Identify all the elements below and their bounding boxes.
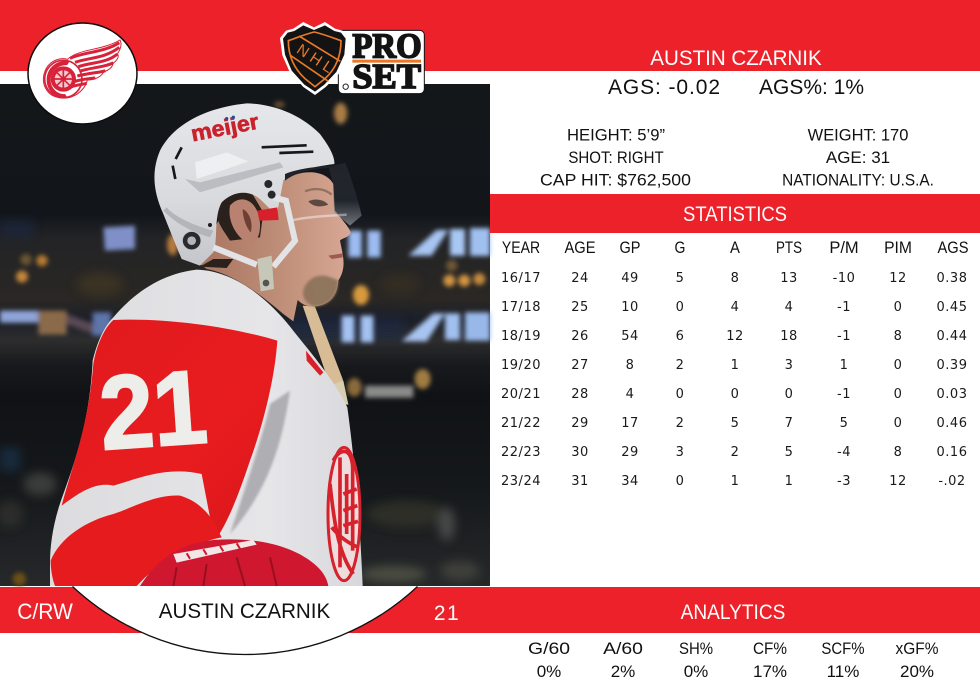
row 21/22: 0: [894, 416, 902, 431]
row 18/19: 18/19: [501, 329, 541, 344]
row 23/24: 12: [889, 474, 907, 489]
row 20/21: 28: [571, 387, 589, 402]
row 18/19: [501, 329, 967, 344]
sponsor wordmark: meijer: [189, 109, 261, 146]
rivets: [264, 180, 272, 188]
statistics header bar: [490, 194, 980, 233]
row 16/17: 12: [889, 271, 907, 286]
row 17/18: -1: [837, 300, 851, 315]
row 21/22: 21/22: [501, 416, 541, 431]
column headers: P/M: [829, 239, 859, 257]
row 20/21: [501, 387, 967, 402]
player photo: [0, 84, 490, 586]
row 21/22: [501, 416, 967, 431]
player bio: left column: HEIGHT: 5’9”: [567, 125, 665, 145]
jersey number: 21: [434, 602, 460, 625]
row 20/21: 20/21: [501, 387, 541, 402]
row 17/18: 25: [571, 300, 589, 315]
row 16/17: -10: [833, 271, 855, 286]
column headers: G: [675, 239, 685, 257]
row 19/20: 3: [785, 358, 793, 373]
row 18/19: 6: [676, 329, 684, 344]
analytics table: xGF%: [896, 639, 938, 658]
analytics table: SH%: [679, 640, 713, 658]
player bio: right column: AGE: 31: [826, 148, 890, 167]
position label: C/RW: [17, 600, 73, 624]
player bio: right column: [782, 125, 934, 190]
row 17/18: 0.45: [937, 300, 967, 315]
orange rule: [352, 60, 421, 63]
NHL shield: NHL: [293, 41, 336, 77]
jersey body: [50, 270, 363, 586]
analytics table: 0%: [684, 662, 708, 681]
row 22/23: 3: [676, 445, 684, 460]
row 19/20: 8: [626, 358, 634, 373]
row 22/23: 2: [731, 445, 739, 460]
analytics table: 0%: [537, 662, 561, 681]
row 17/18: 4: [731, 300, 739, 315]
helmet: [154, 103, 334, 291]
row 21/22: 29: [571, 416, 589, 431]
row 22/23: 30: [571, 445, 589, 460]
row 18/19: 12: [726, 329, 744, 344]
sleeve number: 21: [96, 350, 210, 472]
row 22/23: 22/23: [501, 445, 541, 460]
row 19/20: 19/20: [501, 358, 541, 373]
row 16/17: 24: [571, 271, 589, 286]
row 19/20: 2: [676, 358, 684, 373]
column headers: AGE: [565, 239, 595, 257]
row 20/21: -1: [837, 387, 851, 402]
AGS summary: AGS%: 1%: [759, 76, 864, 99]
registered mark: [343, 84, 348, 89]
row 22/23: [501, 445, 967, 460]
row 18/19: 8: [894, 329, 902, 344]
row 19/20: 27: [571, 358, 589, 373]
hockey stick: [303, 306, 348, 405]
eye and brow: [308, 200, 328, 206]
AGS summary: AGS: -0.02: [608, 76, 720, 99]
row 21/22: 17: [621, 416, 639, 431]
analytics table: A/60: [603, 639, 643, 658]
row 17/18: 0: [676, 300, 684, 315]
side plate: [195, 152, 248, 179]
vents: [173, 145, 313, 179]
NHL sticker: [182, 231, 201, 250]
row 23/24: 23/24: [501, 474, 541, 489]
row 21/22: 7: [785, 416, 793, 431]
player name heading: AUSTIN CZARNIK: [650, 47, 822, 70]
row 18/19: 18: [780, 329, 798, 344]
chin clip: [257, 256, 274, 291]
player bio: left column: SHOT: RIGHT: [568, 148, 664, 167]
row 20/21: 4: [626, 387, 634, 402]
analytics table: 20%: [900, 662, 934, 681]
PRO wordmark: PRO: [352, 27, 422, 65]
row 19/20: [501, 358, 967, 373]
analytics table: SCF%: [821, 640, 865, 658]
AGS summary: [608, 76, 864, 99]
column headers: PTS: [776, 239, 802, 257]
column headers: PIM: [884, 239, 912, 257]
row 20/21: 0: [731, 387, 739, 402]
row 21/22: 2: [676, 416, 684, 431]
row 17/18: 4: [785, 300, 793, 315]
SET wordmark: SET: [352, 58, 421, 96]
row 23/24: 31: [571, 474, 589, 489]
row 18/19: 26: [571, 329, 589, 344]
hair: [200, 190, 263, 268]
analytics table: 11%: [827, 662, 859, 681]
row 22/23: 5: [785, 445, 793, 460]
neck and face: [200, 172, 351, 321]
row 17/18: 17/18: [501, 300, 541, 315]
player bio: left column: [540, 125, 691, 189]
row 19/20: 1: [731, 358, 739, 373]
row 20/21: 0.03: [937, 387, 967, 402]
row 22/23: 29: [621, 445, 639, 460]
row 18/19: -1: [837, 329, 851, 344]
row 16/17: [501, 271, 967, 286]
team crest on jersey: [328, 447, 360, 581]
row 23/24: 34: [621, 474, 639, 489]
nameplate semicircle: [72, 586, 418, 654]
row 19/20: 1: [840, 358, 848, 373]
row 16/17: 0.38: [937, 271, 967, 286]
column headers: A: [730, 239, 740, 257]
row 16/17: 13: [780, 271, 798, 286]
row 20/21: 0: [785, 387, 793, 402]
row 20/21: 0: [676, 387, 684, 402]
row 19/20: 0: [894, 358, 902, 373]
row 23/24: 1: [785, 474, 793, 489]
row 18/19: 0.44: [937, 329, 967, 344]
white wordmark panel: [338, 30, 424, 94]
row 17/18: 10: [621, 300, 639, 315]
row 23/24: 0: [676, 474, 684, 489]
row 20/21: 0: [894, 387, 902, 402]
red side patch: [257, 207, 279, 221]
column headers: [502, 239, 968, 257]
row 22/23: 0.16: [937, 445, 967, 460]
row 23/24: [501, 474, 966, 489]
analytics heading: ANALYTICS: [681, 601, 785, 624]
ear: [229, 199, 260, 244]
row 17/18: 0: [894, 300, 902, 315]
column headers: YEAR: [502, 239, 540, 257]
mesh side panel: [230, 391, 290, 534]
top red banner: [0, 0, 980, 71]
player bio: left column: CAP HIT: $762,500: [540, 170, 691, 189]
glove: [140, 539, 328, 586]
row 16/17: 16/17: [501, 271, 541, 286]
logo: NHL Pro Set: [280, 22, 424, 96]
row 16/17: 5: [676, 271, 684, 286]
analytics table: 2%: [611, 662, 635, 681]
row 18/19: 54: [621, 329, 639, 344]
row 23/24: 1: [731, 474, 739, 489]
row 23/24: -3: [837, 474, 851, 489]
analytics table: G/60: [528, 639, 570, 658]
statistics header bar: STATISTICS: [683, 203, 787, 226]
row 22/23: -4: [837, 445, 851, 460]
collar accent: [306, 351, 323, 376]
row 17/18: [501, 300, 967, 315]
logo circle: team wheel: [28, 23, 137, 124]
column headers: AGS: [938, 239, 968, 257]
player bio: right column: NATIONALITY: U.S.A.: [782, 171, 934, 190]
arena lights: [103, 226, 135, 251]
analytics table: CF%: [753, 639, 787, 658]
row 19/20: 0.39: [937, 358, 967, 373]
nameplate semicircle: AUSTIN CZARNIK: [159, 600, 330, 623]
row 21/22: 5: [840, 416, 848, 431]
analytics table: [528, 639, 938, 681]
visor glare line: [293, 215, 347, 220]
red lower sleeve: [51, 496, 222, 586]
row 23/24: -.02: [938, 474, 966, 489]
player bio: right column: WEIGHT: 170: [808, 125, 908, 145]
beard: [303, 276, 338, 307]
NHL shield: [280, 22, 349, 95]
visor: [328, 163, 362, 226]
bottom red bar: [0, 587, 980, 633]
row 16/17: 8: [731, 271, 739, 286]
analytics table: 17%: [753, 662, 787, 681]
row 22/23: 8: [894, 445, 902, 460]
row 21/22: 0.46: [937, 416, 967, 431]
row 21/22: 5: [731, 416, 739, 431]
icon: winged wheel: [43, 40, 121, 98]
row 16/17: 49: [621, 271, 639, 286]
column headers: GP: [620, 239, 640, 257]
statistics table: [501, 239, 968, 489]
red shoulder panel: [62, 320, 277, 536]
